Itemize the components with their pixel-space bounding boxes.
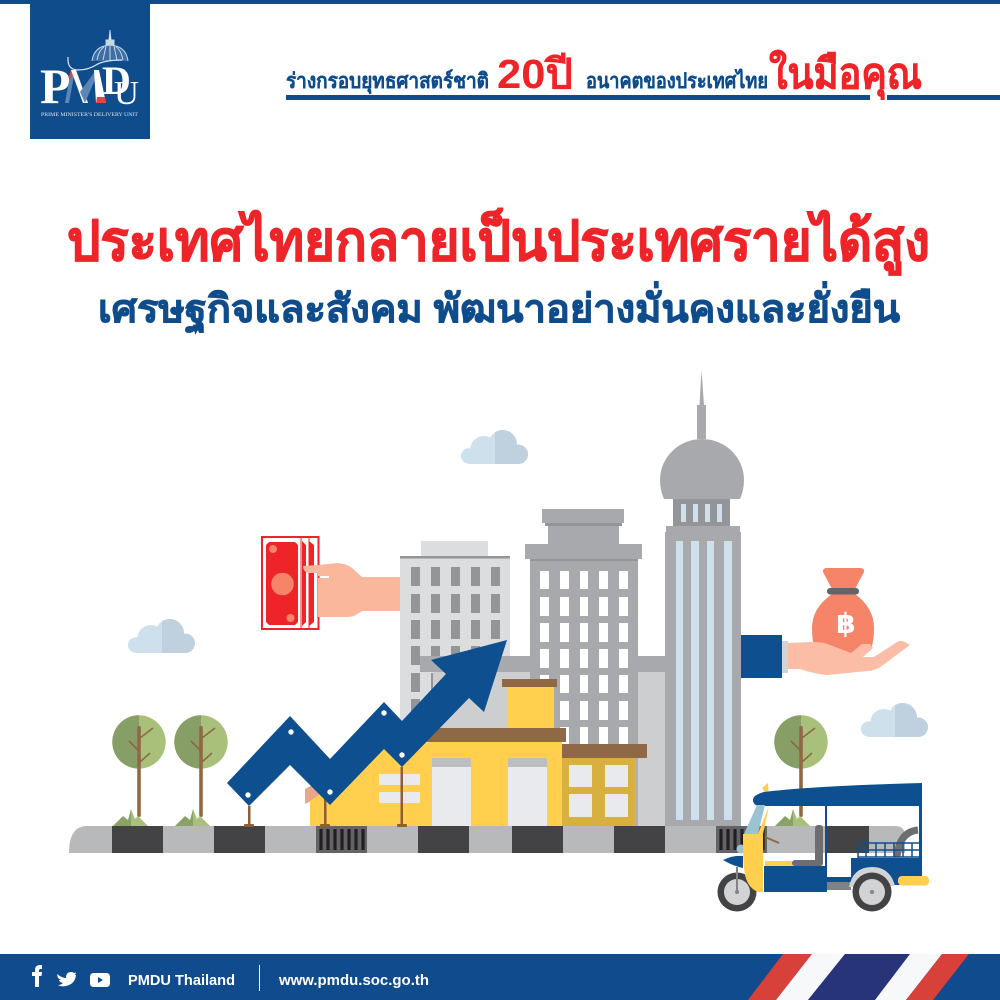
- annex: [562, 744, 647, 826]
- grass 1: [113, 809, 148, 826]
- cloud right: [861, 703, 928, 737]
- headlight: [736, 844, 746, 854]
- chimney: [502, 679, 557, 728]
- roof: [762, 783, 769, 799]
- tree 3: [774, 715, 828, 817]
- cloud left: [128, 619, 195, 653]
- yellow front: [743, 806, 769, 892]
- icon: twitter: [57, 972, 76, 986]
- logo: PMDU: U: [114, 75, 139, 112]
- cabin body: [764, 866, 827, 892]
- icon: money bag: [812, 568, 874, 660]
- building: grey connectors: [420, 656, 666, 826]
- icon: dome: [92, 30, 128, 61]
- header tagline: [286, 49, 1000, 100]
- top bar: [0, 0, 1000, 4]
- header tagline: ร่างกรอบยุทธศาสตร์ชาติ: [286, 69, 489, 95]
- subtitle: เศรษฐกิจและสังคม พัฒนาอย่างมั่นคงและยั่งยืน: [98, 281, 900, 334]
- icon: money bag: ฿: [836, 607, 856, 640]
- tuk-tuk: [718, 783, 929, 912]
- icon: facebook: [32, 965, 42, 987]
- windshield: [744, 805, 765, 834]
- building: grey middle tower: [525, 509, 642, 751]
- icon: youtube: [90, 973, 110, 987]
- logo: PMDU: [30, 4, 150, 139]
- footer: [0, 954, 1000, 1000]
- front wheel: [718, 867, 756, 912]
- rear wheel: [852, 872, 892, 912]
- logo: PMDU: D: [102, 58, 131, 103]
- cloud top: [461, 430, 528, 464]
- house: [305, 679, 647, 826]
- lever: [765, 837, 779, 843]
- bumper: [898, 876, 929, 886]
- logo: PMDU: PRIME MINISTER'S DELIVERY UNIT: [41, 112, 139, 118]
- basket: [858, 843, 919, 860]
- flag stripes: [748, 954, 969, 1000]
- hand holding banknotes: [303, 563, 400, 617]
- rear arch: [897, 830, 918, 857]
- side windows: [379, 774, 420, 803]
- road: [69, 826, 905, 853]
- grass 3: [775, 809, 810, 826]
- growth arrow: [227, 640, 507, 806]
- hand with money bag: [741, 568, 910, 678]
- doors: [432, 758, 547, 826]
- seat: [792, 825, 823, 866]
- tree 1: [112, 715, 166, 817]
- building: light grey left: [400, 541, 510, 728]
- grass 2: [175, 809, 210, 826]
- footer label: PMDU Thailand: [128, 972, 235, 989]
- tree 2: [174, 715, 228, 817]
- icon: red banknotes: [262, 537, 318, 629]
- header tagline: อนาคตของประเทศไทย: [586, 68, 768, 93]
- title: ประเทศไทยกลายเป็นประเทศรายได้สูง: [67, 208, 930, 276]
- rear body: [851, 858, 922, 885]
- logo: PMDU: P: [40, 58, 71, 114]
- letter M stripes: [65, 70, 106, 103]
- footer url: www.pmdu.soc.go.th: [278, 972, 429, 989]
- header tagline: 20ปี: [497, 51, 573, 97]
- front fender: [723, 856, 743, 868]
- header tagline: ในมือคุณ: [769, 49, 922, 100]
- brown roof: [415, 728, 566, 742]
- rear fender: [849, 867, 895, 887]
- arrow supports: [244, 767, 407, 827]
- building: domed tower: [660, 370, 744, 826]
